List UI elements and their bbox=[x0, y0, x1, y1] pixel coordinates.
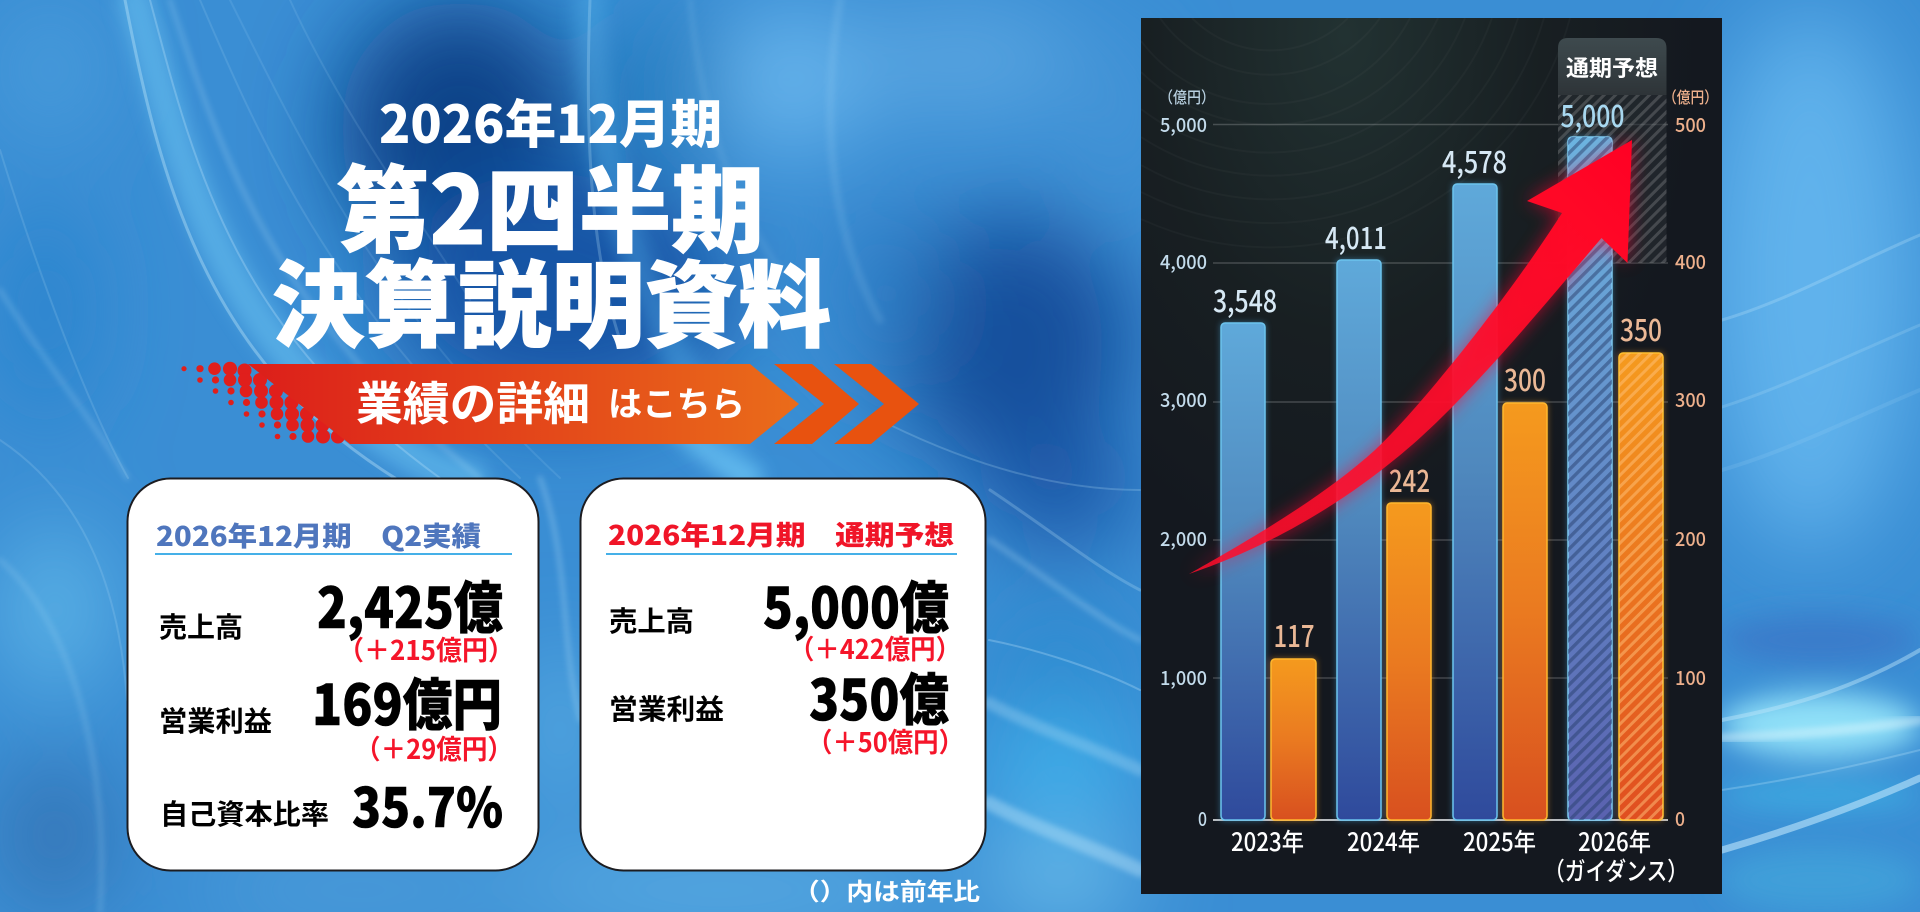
right axis labels: 300 bbox=[1675, 386, 1706, 413]
left axis labels: 5,000 bbox=[1160, 111, 1207, 138]
ribbon body bbox=[248, 364, 799, 444]
left axis labels: 3,000 bbox=[1160, 386, 1207, 413]
value labels: sales bbox=[1213, 92, 1624, 321]
right axis labels: 500 bbox=[1675, 111, 1706, 138]
value labels: sales: 5,000 bbox=[1560, 92, 1624, 136]
metric: operating profit bbox=[159, 661, 513, 767]
metric: operating profit forecast: 営業利益 bbox=[609, 688, 724, 728]
left axis labels: 1,000 bbox=[1160, 664, 1207, 691]
metric: operating profit forecast: 350億 bbox=[809, 656, 949, 737]
title: line 2: 決算説明資料 bbox=[272, 231, 831, 367]
metric: operating profit: 169億円 bbox=[312, 661, 502, 742]
title block bbox=[272, 83, 831, 367]
metric: sales: （＋215億円） bbox=[338, 629, 514, 668]
metric: operating profit forecast: （＋50億円） bbox=[807, 721, 964, 760]
icon: chevron 1 bbox=[774, 364, 859, 444]
right axis labels: 0 bbox=[1675, 805, 1685, 832]
left axis labels: 0 bbox=[1198, 805, 1207, 832]
left axis labels: （億円） bbox=[1159, 84, 1215, 108]
heading: forecast: 2026年12月期 通期予想 bbox=[608, 514, 954, 553]
panel: Q2 results bbox=[128, 478, 538, 870]
value labels: sales: 4,578 bbox=[1442, 138, 1507, 182]
heading: Q2 results: 2026年12月期 Q2実績 bbox=[156, 515, 481, 554]
left axis labels: 2,000 bbox=[1160, 525, 1207, 552]
metric: sales forecast: 売上高 bbox=[609, 600, 694, 640]
bars: 2026 guidance (hatched) bbox=[1568, 137, 1663, 820]
right axis labels: （億円） bbox=[1663, 84, 1718, 108]
metric: operating profit: （＋29億円） bbox=[355, 728, 513, 767]
grid lines bbox=[1213, 124, 1668, 678]
bar glows bbox=[1221, 137, 1663, 820]
bars: 2023 bbox=[1221, 323, 1316, 820]
right axis labels: 100 bbox=[1675, 664, 1706, 691]
bars: 2024 bbox=[1337, 260, 1431, 820]
metric: sales: 2,425億 bbox=[317, 564, 503, 645]
chart panel: sales and operating profit bbox=[1141, 18, 1722, 894]
forecast highlight column bbox=[1558, 38, 1666, 263]
x axis labels: 2026年 bbox=[1578, 823, 1651, 859]
left axis labels bbox=[1159, 84, 1215, 832]
title: fiscal period: 2026年12月期 bbox=[379, 83, 722, 158]
x axis labels bbox=[1231, 823, 1688, 888]
metric: sales forecast: （＋422億円） bbox=[789, 628, 961, 667]
right axis labels: 200 bbox=[1675, 525, 1706, 552]
metric: equity ratio: 自己資本比率 bbox=[160, 793, 329, 833]
label: full-year forecast: 通期予想 bbox=[1566, 51, 1658, 83]
value labels: operating profit bbox=[1274, 306, 1662, 656]
metric: sales forecast: 5,000億 bbox=[763, 564, 949, 645]
ribbon: details link bbox=[181, 362, 919, 444]
panel: full-year forecast bbox=[580, 478, 986, 870]
metric: operating profit forecast bbox=[609, 656, 964, 760]
value labels: operating profit: 300 bbox=[1504, 356, 1546, 400]
metric: equity ratio bbox=[160, 764, 503, 843]
value labels: operating profit: 117 bbox=[1274, 612, 1314, 656]
right axis labels bbox=[1663, 84, 1718, 832]
x axis labels: 2024年 bbox=[1347, 823, 1420, 859]
metric: sales: 売上高 bbox=[159, 606, 243, 646]
decorative arcs bbox=[1141, 18, 1570, 247]
ribbon text large: 業績の詳細 bbox=[356, 368, 590, 434]
left axis labels: 4,000 bbox=[1160, 248, 1207, 275]
icon: halftone dots bbox=[181, 362, 345, 444]
value labels: sales: 4,011 bbox=[1325, 214, 1387, 258]
footnote: （）内は前年比 bbox=[793, 872, 980, 907]
metric: operating profit: 営業利益 bbox=[159, 700, 272, 740]
ribbon text small: はこちら bbox=[608, 377, 745, 426]
metric: sales forecast bbox=[609, 564, 961, 667]
heading rule bbox=[155, 553, 512, 555]
x axis labels: 2023年 bbox=[1231, 823, 1304, 859]
x axis labels: （ガイダンス） bbox=[1544, 852, 1688, 888]
bars: 2025 bbox=[1453, 184, 1547, 820]
value labels: sales: 3,548 bbox=[1213, 277, 1277, 321]
axis baseline bbox=[1213, 819, 1668, 821]
metric: equity ratio: 35.7% bbox=[352, 764, 503, 843]
heading rule bbox=[606, 553, 957, 555]
value labels: operating profit: 350 bbox=[1620, 306, 1662, 350]
x axis labels: 2025年 bbox=[1463, 823, 1536, 859]
right axis labels: 400 bbox=[1675, 248, 1706, 275]
arrow: growth trend bbox=[1189, 140, 1632, 574]
value labels: operating profit: 242 bbox=[1389, 457, 1430, 501]
title: line 1: 第2四半期 bbox=[337, 136, 764, 272]
icon: chevron 2 bbox=[834, 364, 919, 444]
metric: sales bbox=[159, 564, 514, 668]
